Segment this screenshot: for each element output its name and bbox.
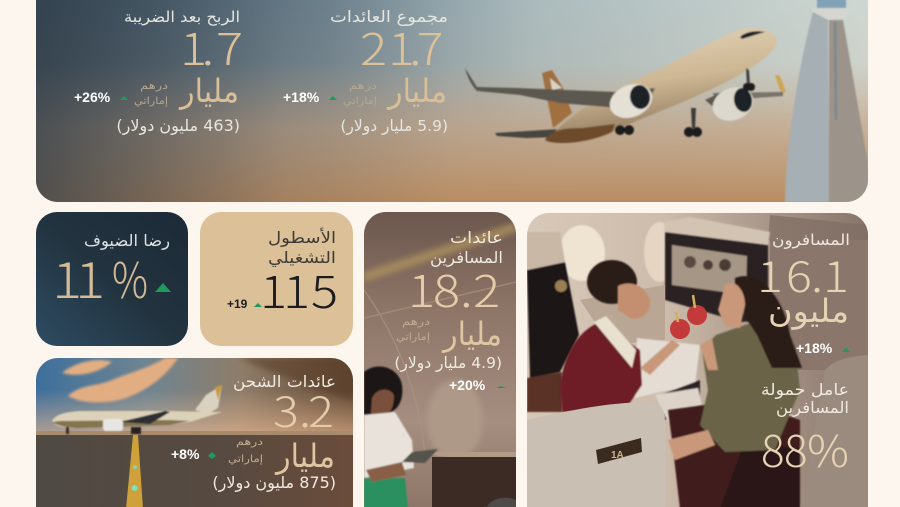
metric: total revenue: إماراتي [343, 96, 377, 107]
icon: runway centre line [126, 435, 143, 507]
panel: guest satisfaction [36, 212, 188, 346]
metric: passenger revenue figures: 18.2 [408, 256, 500, 320]
panel: passengers photo [527, 213, 868, 507]
metric: total revenue: مليار [386, 72, 447, 110]
metric: profit after tax: +26% [74, 89, 111, 105]
metric: passenger revenue figures: إماراتي [396, 332, 430, 343]
panel: operating fleet: +19 [227, 297, 248, 311]
metric: cargo revenue figures: (875 مليون دولار) [212, 473, 336, 493]
panel: operating fleet: التشغيلي [268, 248, 336, 268]
metric: cargo revenue figures: درهم [236, 437, 263, 448]
panel: guest satisfaction: % [112, 242, 148, 313]
icon: front seat with 1A tag [527, 402, 665, 507]
icon: dark seat shell [527, 232, 579, 412]
metric: cargo revenue figures: 3.2 [273, 380, 334, 440]
metric: passengers figures: 88 [761, 416, 808, 480]
metric: profit after tax [74, 8, 243, 136]
metric: profit after tax: 1.7 [180, 14, 243, 78]
metric: passenger revenue figures: المسافرين [430, 248, 503, 268]
metric: passenger revenue figures: درهم [402, 317, 430, 328]
icon: aeroplane taking off [465, 28, 786, 143]
panel: cargo revenue [36, 358, 353, 507]
metric: total revenue: 21.7 [360, 14, 444, 78]
icon: cargo aeroplane [52, 385, 222, 434]
metric: passengers figures: المسافرون [772, 231, 850, 249]
icon: right seat [800, 355, 868, 507]
metric: profit after tax: (463 مليون دولار) [116, 116, 240, 136]
metric: passenger revenue figures: +20% [449, 377, 486, 393]
metric: passengers figures: عامل حمولة [761, 380, 849, 400]
icon: up arrow [155, 283, 171, 292]
panel: hero revenue and profit [36, 0, 868, 202]
metric: total revenue: +18% [283, 89, 320, 105]
metric: cargo revenue figures: إماراتي [228, 454, 263, 465]
metric: cargo revenue figures: +8% [171, 446, 200, 462]
panel: operating fleet [200, 212, 353, 346]
metric: passenger revenue figures: مليار [441, 315, 502, 353]
metric: passenger revenue figures: عائدات [450, 228, 503, 247]
icon: control tower [785, 0, 868, 202]
metric: passenger revenue figures: (4.9 مليار دولار) [394, 354, 502, 373]
metric: total revenue: درهم [349, 81, 377, 92]
panel: guest satisfaction: رضا الضيوف [84, 231, 170, 251]
metric: passengers figures: +18% [796, 340, 833, 356]
metric: cargo revenue figures: مليار [274, 437, 335, 475]
icon: seatback screen [664, 217, 770, 322]
metric: profit after tax: الربح بعد الضريبة [124, 8, 240, 26]
metric: passenger revenue figures [394, 228, 506, 393]
metric: total revenue: (5.9 مليار دولار) [340, 117, 448, 136]
metric: profit after tax: مليار [178, 72, 239, 110]
icon: woman with tablet [364, 366, 438, 507]
icon: drinks [670, 295, 707, 339]
panel: passenger revenue [364, 212, 516, 507]
icon: front seat with 1A tag: 1A [611, 450, 624, 461]
metric: total revenue: مجموع العائدات [330, 7, 448, 27]
panel: operating fleet: الأسطول [268, 227, 336, 248]
icon: woman in olive jacket [668, 276, 802, 507]
metric: passengers figures: % [807, 416, 849, 480]
panel: guest satisfaction: 11 [52, 242, 105, 313]
icon: woman in red jacket [560, 260, 702, 422]
panel: operating fleet: 115 [260, 257, 338, 321]
metric: passengers figures [757, 231, 850, 480]
metric: profit after tax: إماراتي [134, 96, 168, 107]
metric: total revenue [283, 7, 448, 136]
metric: cargo revenue figures [171, 372, 336, 493]
metric: profit after tax: درهم [140, 81, 168, 92]
metric: passengers figures: 16.1 [757, 245, 849, 305]
metric: passengers figures: المسافرين [776, 398, 849, 418]
metric: cargo revenue figures: عائدات الشحن [233, 372, 336, 392]
metric: passengers figures: مليون [768, 292, 849, 330]
